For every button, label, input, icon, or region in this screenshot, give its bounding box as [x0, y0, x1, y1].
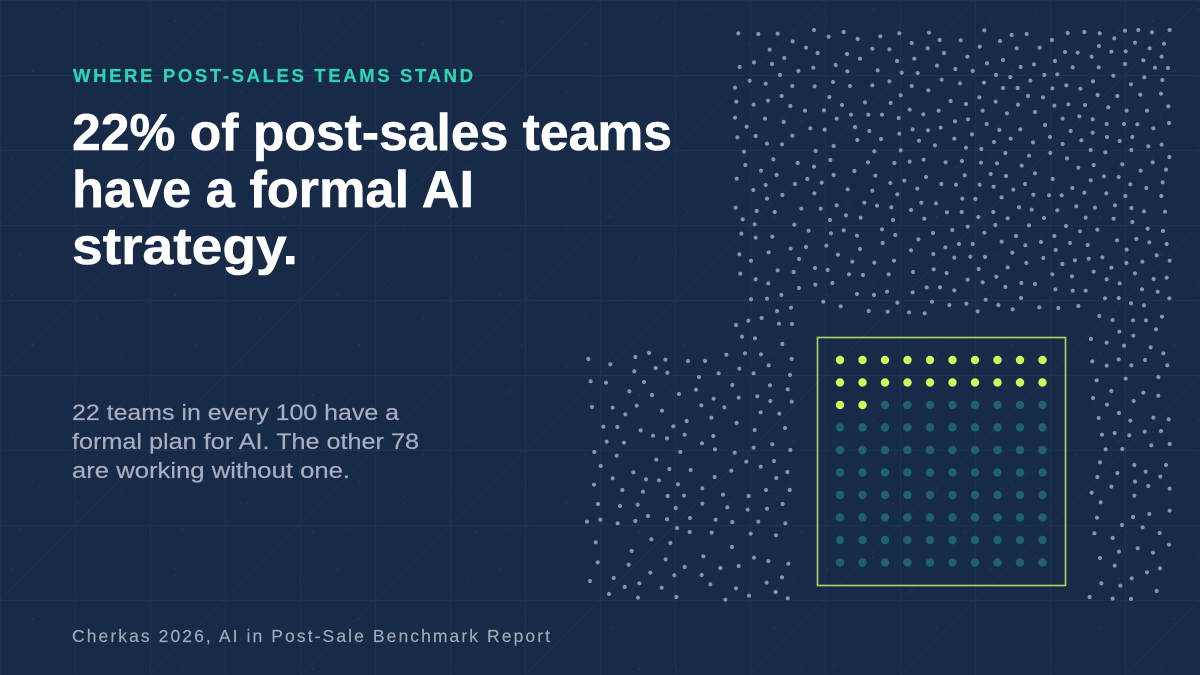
title: 22% of post-sales teams [72, 104, 672, 162]
panel: 100-dot waffle chart [818, 338, 1066, 586]
body text: formal plan for AI. The other 78 [72, 429, 419, 454]
chart frame [818, 338, 1066, 586]
title: have a formal AI [72, 161, 474, 219]
title: strategy. [72, 218, 298, 276]
source footer: Cherkas 2026, AI in Post-Sale Benchmark Report [72, 626, 550, 646]
scattered dot field [587, 30, 1170, 600]
body text: are working without one. [72, 458, 350, 483]
body text [72, 400, 419, 483]
body text: 22 teams in every 100 have a [72, 400, 400, 425]
title [72, 104, 672, 276]
muted dots: 78 teams without a plan [840, 405, 1042, 562]
highlighted dots: 22 teams with a formal plan [840, 360, 1042, 405]
kicker heading: WHERE POST-SALES TEAMS STAND [73, 65, 473, 86]
